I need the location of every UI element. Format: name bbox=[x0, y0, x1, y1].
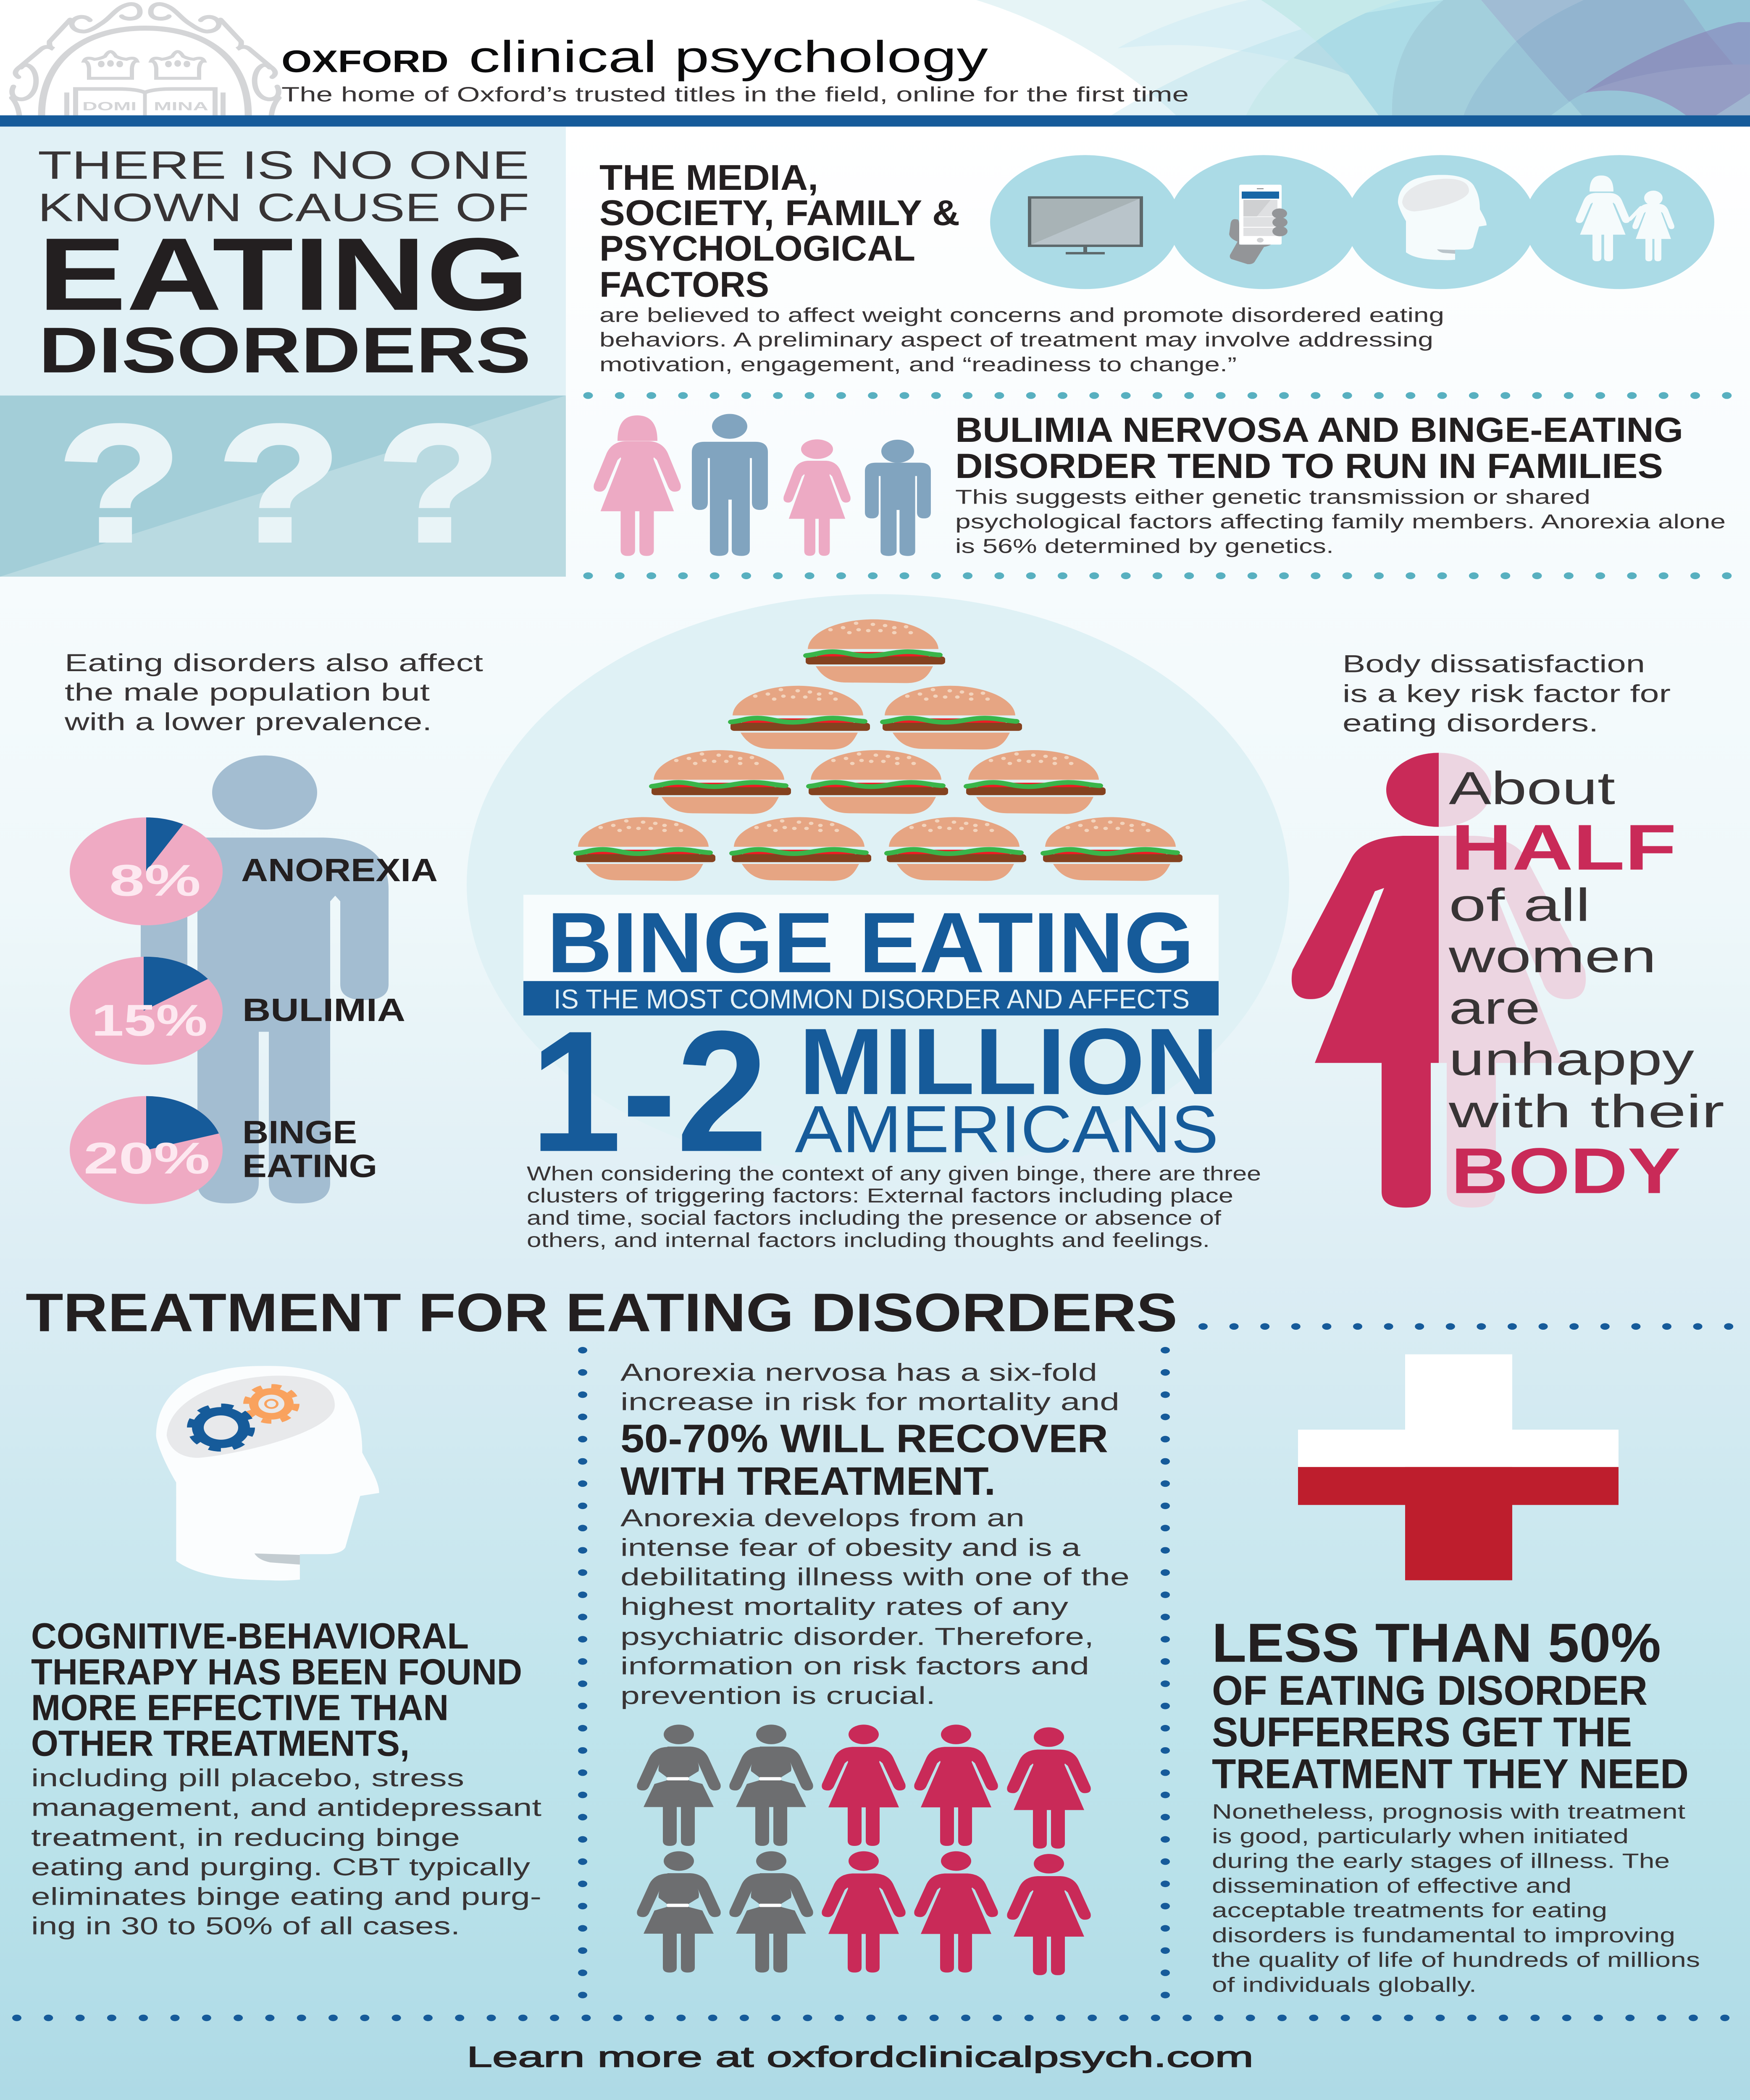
label: binge eating: BINGE bbox=[242, 1114, 357, 1150]
intro text: with a lower prevalence. bbox=[64, 708, 432, 735]
body text: When considering the context of any given binge, there are three bbox=[527, 1162, 1261, 1185]
heading: OTHER TREATMENTS, bbox=[31, 1723, 410, 1764]
banner: most common disorder: IS THE MOST COMMON DISORDER AND AFFECTS bbox=[554, 984, 1190, 1014]
pie chart: anorexia 8% bbox=[70, 817, 223, 925]
pie chart: bulimia 15%: 15% bbox=[92, 995, 208, 1045]
dotted divider bbox=[588, 571, 1733, 580]
intro text: increase in risk for mortality and bbox=[620, 1388, 1119, 1415]
intro text: Anorexia nervosa has a six-fold bbox=[620, 1359, 1097, 1386]
statistic: 1-2 million americans: AMERICANS bbox=[795, 1092, 1219, 1166]
heading: COGNITIVE-BEHAVIORAL bbox=[31, 1616, 469, 1656]
panel: question marks: ? bbox=[218, 391, 341, 576]
heading: WITH TREATMENT. bbox=[620, 1460, 996, 1504]
pictogram: ten women bbox=[637, 1725, 1091, 1975]
heading: FACTORS bbox=[599, 264, 769, 304]
label: anorexia: ANOREXIA bbox=[241, 852, 438, 888]
heading bbox=[955, 410, 1683, 486]
footer link: Learn more at oxfordclinicalpsych.com bbox=[467, 2040, 1253, 2073]
dotted divider bbox=[588, 391, 1733, 400]
background circle bbox=[467, 594, 1289, 1175]
panel: media society family factors bbox=[599, 155, 1714, 375]
body text: psychological factors affecting family members. Anorexia alone bbox=[955, 510, 1726, 533]
statistic text: about half of all women: with their bbox=[1448, 1086, 1724, 1137]
body text: prevention is crucial. bbox=[620, 1682, 935, 1709]
statistic text: about half of all women: women bbox=[1448, 931, 1656, 982]
icon: head profile bbox=[1346, 155, 1536, 289]
body text: during the early stages of illness. The bbox=[1212, 1849, 1670, 1872]
body text bbox=[1212, 1800, 1700, 1996]
heading: treatment: TREATMENT FOR EATING DISORDERS bbox=[26, 1282, 1177, 1343]
intro text bbox=[620, 1359, 1119, 1415]
body text: acceptable treatments for eating bbox=[1212, 1899, 1607, 1922]
heading: THERAPY HAS BEEN FOUND bbox=[31, 1652, 522, 1692]
body text: highest mortality rates of any bbox=[620, 1593, 1069, 1620]
panel: anorexia nervosa bbox=[620, 1359, 1130, 1975]
intro text bbox=[64, 649, 483, 735]
body text bbox=[599, 304, 1444, 375]
banner: most common disorder bbox=[523, 981, 1219, 1016]
label: binge eating: EATING bbox=[242, 1148, 377, 1184]
headline: there is no one known cause of eating disorders bbox=[38, 143, 531, 386]
body text bbox=[31, 1764, 541, 1940]
statistic text: about half of all women: About bbox=[1449, 763, 1615, 814]
body text: dissemination of effective and bbox=[1212, 1874, 1571, 1897]
intro text: Eating disorders also affect bbox=[65, 649, 483, 677]
body text: Anorexia develops from an bbox=[620, 1504, 1025, 1532]
body text: clusters of triggering factors: External factors including place bbox=[527, 1184, 1233, 1207]
heading bbox=[31, 1616, 522, 1764]
statistic text: about half of all women: unhappy bbox=[1449, 1034, 1694, 1085]
body text bbox=[620, 1504, 1130, 1709]
body text: disorders is fundamental to improving bbox=[1212, 1924, 1675, 1947]
body text: debilitating illness with one of the bbox=[620, 1563, 1130, 1591]
heading bbox=[599, 157, 960, 304]
body text: Nonetheless, prognosis with treatment bbox=[1212, 1800, 1685, 1823]
panel: question marks: ? bbox=[377, 391, 501, 576]
headline: there is no one known cause of eating disorders: EATING bbox=[38, 216, 529, 332]
pie chart: binge eating 20%: 20% bbox=[84, 1133, 210, 1183]
statistic text: about half of all women: BODY bbox=[1451, 1135, 1681, 1207]
intro text bbox=[1343, 650, 1671, 737]
pie chart: anorexia 8%: 8% bbox=[109, 856, 201, 905]
intro text: is a key risk factor for bbox=[1343, 680, 1671, 707]
body text: is good, particularly when initiated bbox=[1212, 1824, 1629, 1848]
body text: behaviors. A preliminary aspect of treatment may involve addressing bbox=[599, 328, 1433, 351]
headline: there is no one known cause of eating disorders: THERE IS NO ONE bbox=[38, 143, 529, 187]
body text: This suggests either genetic transmission or shared bbox=[955, 486, 1590, 508]
tagline: The home of Oxford’s trusted titles in the field, online for the first time bbox=[281, 83, 1189, 106]
male silhouette bbox=[141, 756, 389, 1203]
body text: eliminates binge eating and purg- bbox=[31, 1883, 541, 1910]
body text: are believed to affect weight concerns and promote disordered eating bbox=[599, 304, 1444, 326]
heading: 50-70% WILL RECOVER bbox=[620, 1417, 1108, 1461]
oxford crest logo: MINA bbox=[154, 100, 208, 113]
body text: of individuals globally. bbox=[1212, 1973, 1477, 1996]
heading: SOCIETY, FAMILY & bbox=[599, 192, 960, 233]
panel: cognitive behavioral therapy bbox=[31, 1366, 541, 1940]
icon: smartphone in hand bbox=[1169, 155, 1358, 289]
heading: MORE EFFECTIVE THAN bbox=[31, 1688, 449, 1728]
body text: information on risk factors and bbox=[620, 1652, 1089, 1680]
statistic text: about half of all women: are bbox=[1449, 982, 1540, 1034]
panel: less than 50% bbox=[1212, 1354, 1700, 1996]
statistic: 1-2 million americans bbox=[530, 995, 1219, 1188]
intro text: eating disorders. bbox=[1343, 709, 1598, 737]
body text: ing in 30 to 50% of all cases. bbox=[31, 1912, 460, 1940]
icon: burger pyramid bbox=[576, 620, 1182, 881]
icon: head with gears bbox=[156, 1366, 379, 1580]
intro text: the male population but bbox=[65, 678, 430, 706]
panel: body dissatisfaction bbox=[1292, 650, 1724, 1208]
statistic text: about half of all women: HALF bbox=[1451, 811, 1676, 884]
body text: motivation, engagement, and “readiness to change.” bbox=[599, 353, 1237, 375]
body text: intense fear of obesity and is a bbox=[620, 1534, 1081, 1561]
label: binge eating bbox=[242, 1114, 377, 1184]
statistic text: about half of all women bbox=[1448, 763, 1724, 1207]
body text: treatment, in reducing binge bbox=[31, 1824, 460, 1851]
statistic: 1-2 million americans: 1-2 bbox=[530, 995, 768, 1188]
panel: no one known cause bbox=[0, 126, 566, 396]
heading bbox=[620, 1417, 1108, 1504]
panel: binge eating bbox=[467, 594, 1289, 1252]
woman silhouette half filled bbox=[1292, 753, 1586, 1208]
oxford crest logo: DOMI bbox=[82, 100, 137, 113]
title box: binge eating: BINGE EATING bbox=[547, 895, 1194, 990]
body text: eating and purging. CBT typically bbox=[31, 1853, 530, 1881]
oxford crest logo bbox=[12, 4, 279, 116]
heading: PSYCHOLOGICAL bbox=[599, 228, 915, 268]
header band bbox=[0, 0, 1750, 126]
header blue bar bbox=[0, 116, 1750, 126]
icon: mother and child bbox=[1524, 155, 1714, 289]
heading: THE MEDIA, bbox=[599, 157, 818, 197]
panel: question marks: ? bbox=[58, 391, 181, 576]
brand title: OXFORD bbox=[281, 44, 449, 79]
pie chart: binge eating 20% bbox=[70, 1096, 223, 1204]
statistic text: about half of all women: of all bbox=[1449, 879, 1590, 931]
body text: others, and internal factors including thoughts and feelings. bbox=[527, 1229, 1210, 1252]
icon: television bbox=[990, 155, 1180, 289]
panel: question marks bbox=[0, 391, 566, 577]
body text: is 56% determined by genetics. bbox=[955, 535, 1334, 557]
body text: including pill placebo, stress bbox=[31, 1764, 464, 1792]
icon: medical cross bbox=[1298, 1354, 1619, 1580]
panel: families bbox=[594, 410, 1726, 557]
label: bulimia: BULIMIA bbox=[242, 992, 405, 1028]
body text: management, and antidepressant bbox=[31, 1794, 541, 1821]
headline: there is no one known cause of eating disorders: DISORDERS bbox=[39, 314, 531, 386]
body text: the quality of life of hundreds of millions bbox=[1212, 1948, 1700, 1971]
heading bbox=[1212, 1612, 1689, 1797]
body text: psychiatric disorder. Therefore, bbox=[620, 1622, 1094, 1650]
body text bbox=[527, 1162, 1261, 1252]
headline: there is no one known cause of eating disorders: KNOWN CAUSE OF bbox=[38, 186, 529, 230]
pie chart: bulimia 15% bbox=[70, 957, 223, 1065]
body text: and time, social factors including the presence or absence of bbox=[527, 1207, 1221, 1229]
intro text: Body dissatisfaction bbox=[1343, 650, 1645, 677]
icon: family of four bbox=[594, 414, 931, 556]
panel: male population bbox=[64, 649, 483, 1204]
brand title: clinical psychology bbox=[469, 32, 988, 81]
statistic: 1-2 million americans: MILLION bbox=[799, 1009, 1219, 1114]
decorative header arcs bbox=[0, 0, 1750, 116]
body text bbox=[955, 486, 1726, 557]
